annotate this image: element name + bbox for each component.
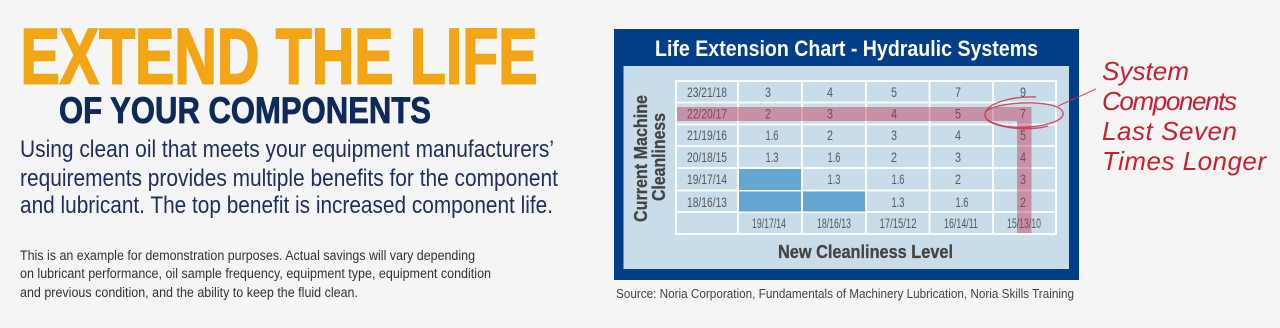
table values: 2 — [891, 149, 897, 165]
table values: 2 — [955, 171, 961, 187]
blue cells — [739, 169, 865, 212]
table values: 9 — [1020, 84, 1026, 100]
table values: 1.3 — [828, 171, 841, 187]
table values: 5 — [1020, 127, 1026, 143]
disclaimer text: and previous condition, and the ability to keep the fluid clean. — [20, 285, 358, 300]
callout text: handwritten note: Last Seven — [1102, 116, 1237, 146]
row labels: 23/21/18 — [687, 84, 727, 100]
table values: 1.6 — [766, 127, 779, 143]
row labels: 19/17/14 — [687, 171, 727, 187]
disclaimer text — [20, 248, 491, 300]
red highlight band — [677, 107, 1032, 233]
row labels: 18/16/13 — [687, 194, 727, 210]
column labels: 19/17/14 — [752, 215, 786, 231]
y-axis label: Current Machine — [631, 95, 651, 222]
column labels: 15/13/10 — [1007, 215, 1041, 231]
callout text: handwritten note: Times Longer — [1102, 146, 1267, 176]
column labels — [752, 215, 1041, 231]
body text: Using clean oil that meets your equipment manufacturers’ — [20, 136, 554, 163]
body text — [20, 136, 558, 219]
row labels — [687, 84, 727, 210]
table values: 4 — [955, 127, 961, 143]
table values: 3 — [955, 149, 961, 165]
table values: 4 — [891, 106, 897, 122]
table values: 2 — [1020, 194, 1026, 210]
column labels: 18/16/13 — [817, 215, 851, 231]
callout text: handwritten note: Components — [1102, 86, 1237, 116]
table values: 2 — [827, 127, 833, 143]
panel frame — [614, 29, 1079, 280]
body text: requirements provides multiple benefits for the component — [20, 165, 558, 192]
table values: 1.6 — [828, 149, 841, 165]
disclaimer text: This is an example for demonstration purposes. Actual savings will vary depending — [20, 248, 475, 263]
chart background — [624, 66, 1069, 269]
table values: 3 — [1020, 171, 1026, 187]
table values: 3 — [891, 127, 897, 143]
row labels: 21/19/16 — [687, 127, 727, 143]
table values: 5 — [891, 84, 897, 100]
row labels: 20/18/15 — [687, 149, 727, 165]
callout text: handwritten note: System — [1102, 56, 1189, 86]
table values: 3 — [827, 106, 833, 122]
table values: 7 — [955, 84, 961, 100]
left column: headline and copy — [20, 12, 558, 300]
body text: and lubricant. The top benefit is increased component life. — [20, 192, 553, 219]
table values — [765, 84, 1026, 210]
x-axis label: New Cleanliness Level — [778, 242, 953, 262]
table values: 3 — [765, 84, 771, 100]
table values: 1.3 — [766, 149, 779, 165]
callout text: handwritten note — [1102, 56, 1267, 176]
subtitle: of your components: OF YOUR COMPONENTS — [59, 90, 431, 131]
panel: life extension chart — [614, 29, 1079, 280]
table values: 1.6 — [956, 194, 969, 210]
row labels: 22/20/17 — [687, 106, 727, 122]
y-axis label — [631, 95, 669, 222]
chart title: Life Extension Chart - Hydraulic Systems — [655, 36, 1038, 61]
table values: 7 — [1020, 106, 1026, 122]
table values: 5 — [955, 106, 961, 122]
disclaimer text: on lubricant performance, oil sample frequency, equipment type, equipment condition — [20, 266, 491, 281]
callout: hand-drawn circle and leader — [985, 89, 1096, 129]
column labels: 16/14/11 — [944, 215, 978, 231]
column labels: 17/15/12 — [880, 215, 917, 231]
table values: 1.6 — [892, 171, 905, 187]
y-axis label: Cleanliness — [649, 113, 669, 201]
table values: 4 — [1020, 149, 1026, 165]
table values: 1.3 — [892, 194, 905, 210]
source note: Source: Noria Corporation, Fundamentals of Machinery Lubrication, Noria Skills Training — [616, 286, 1074, 301]
title: extend the life: EXTEND THE LIFE — [20, 12, 538, 100]
table grid — [676, 81, 1056, 234]
table values: 4 — [827, 84, 833, 100]
table values: 2 — [765, 106, 771, 122]
